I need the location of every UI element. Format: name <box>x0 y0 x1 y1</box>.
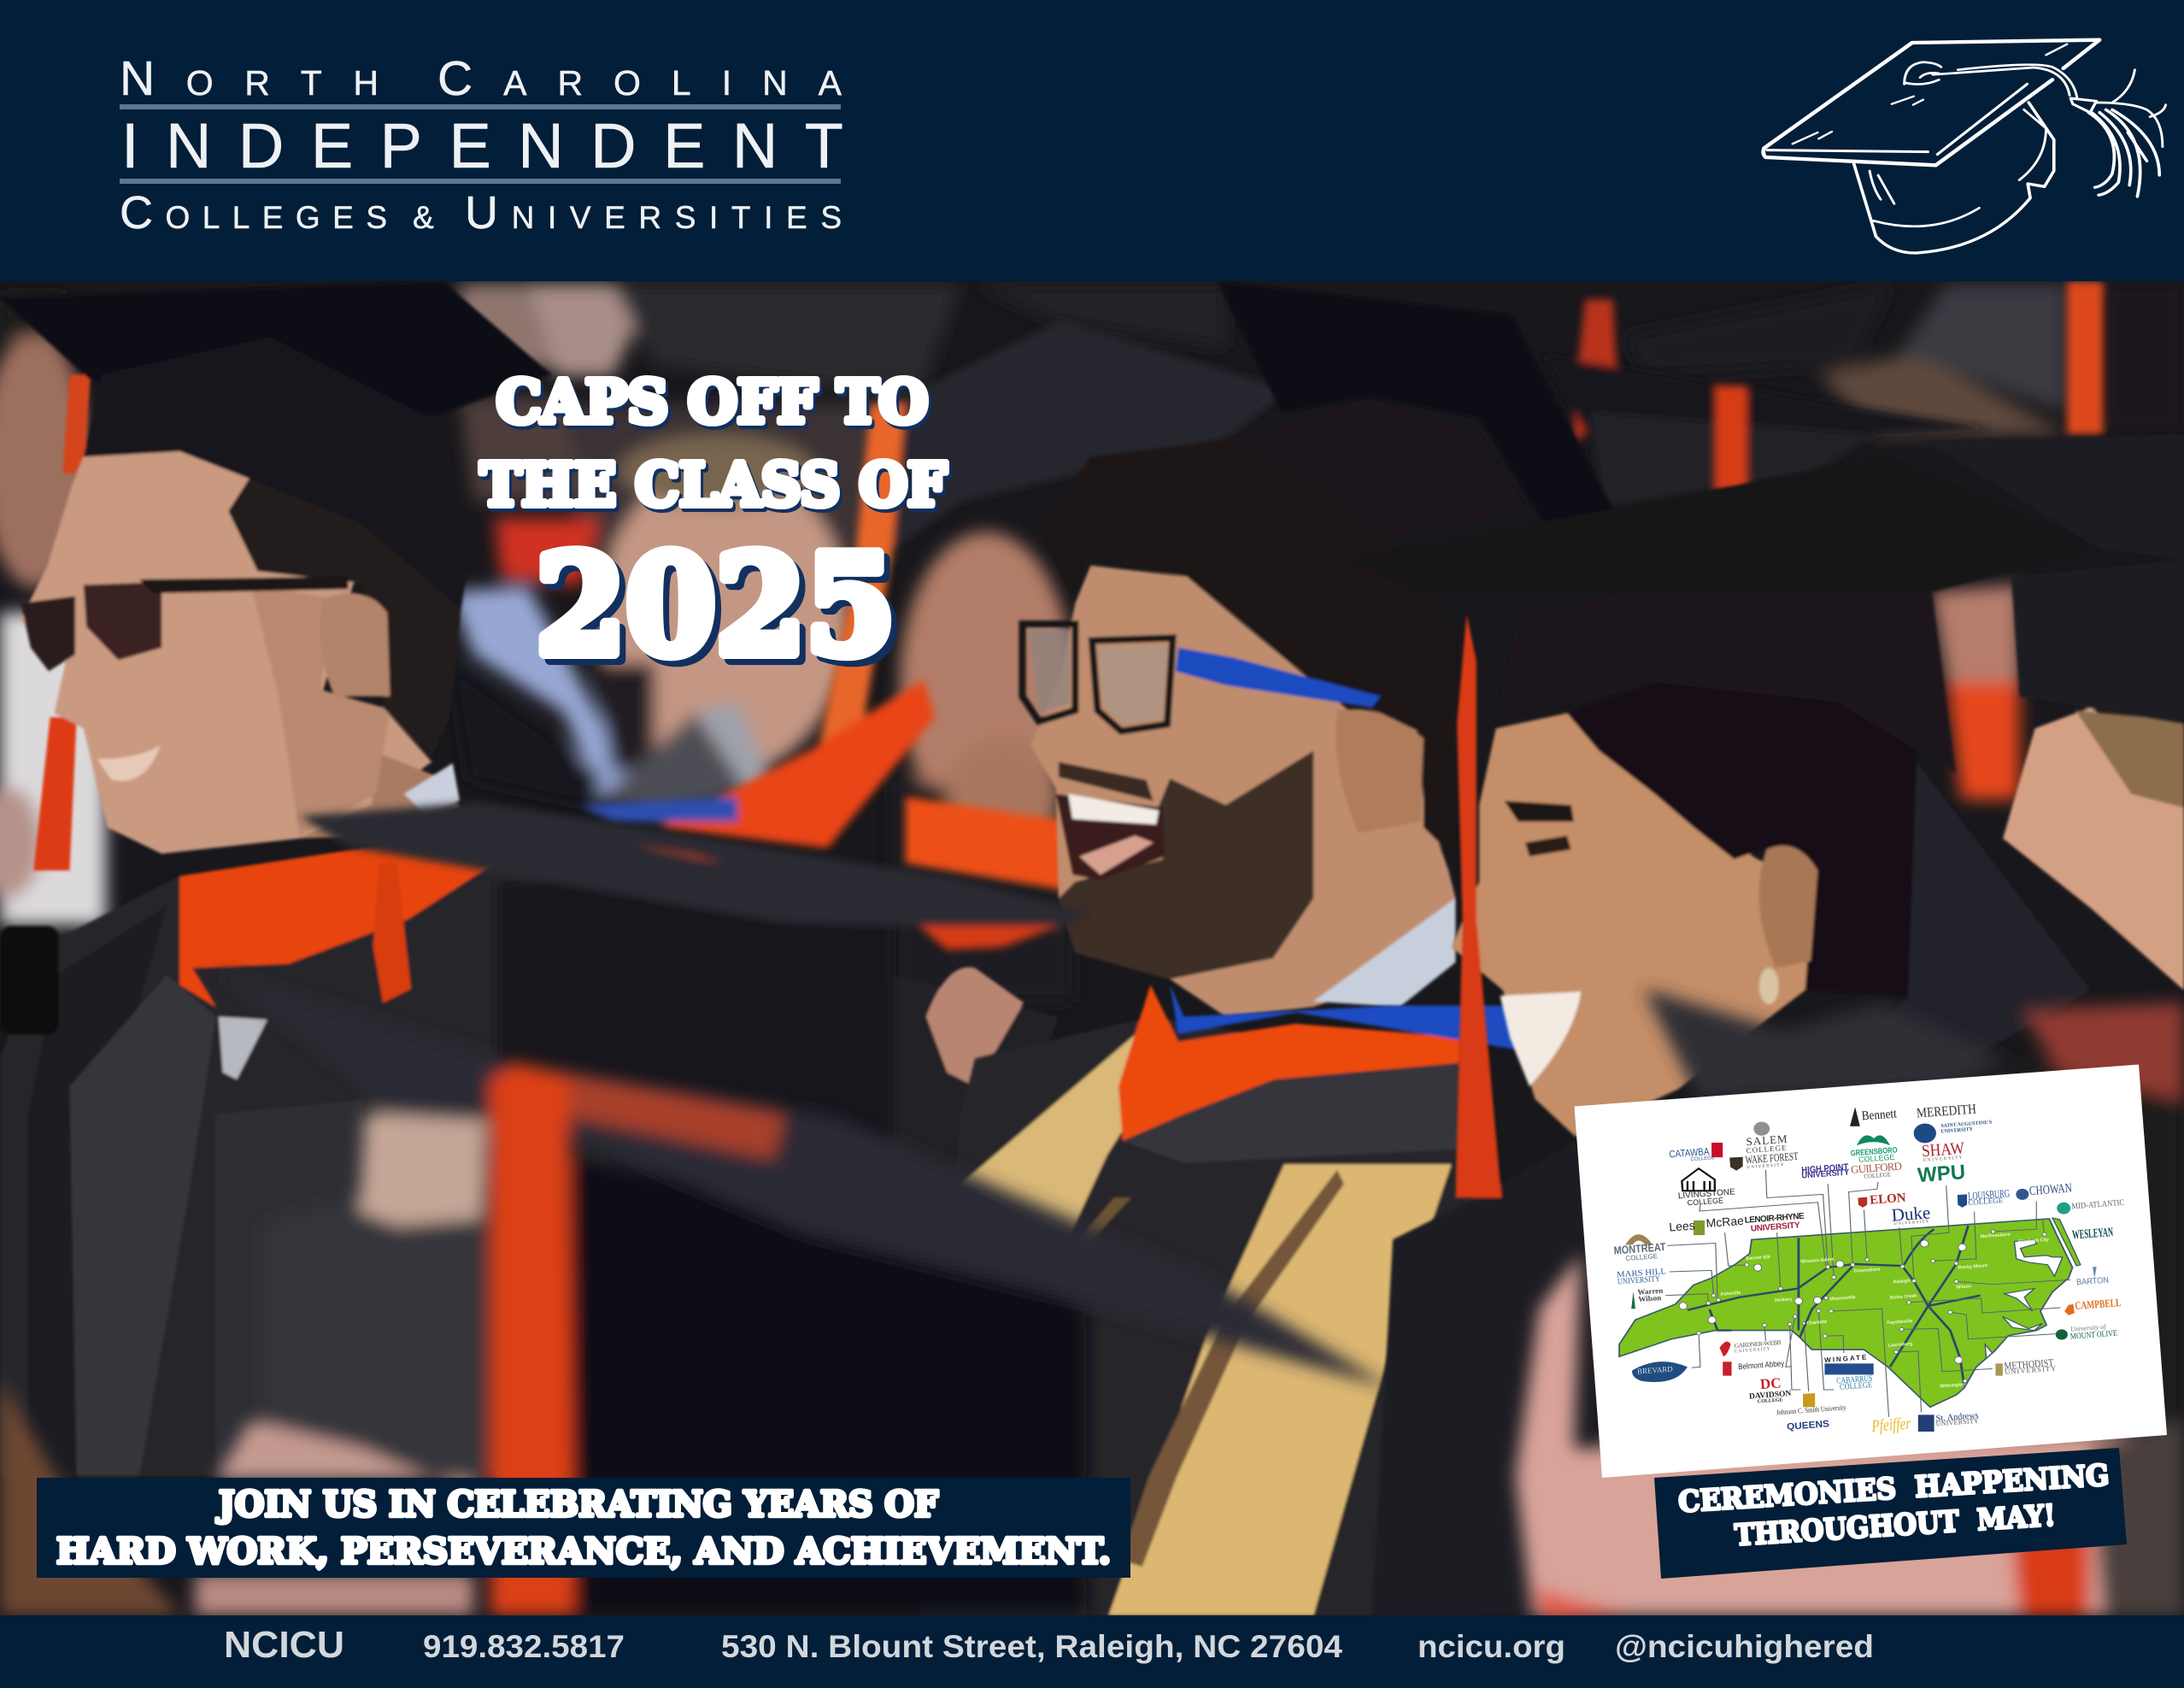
city names on the map: Murfreesboro <box>1980 1232 2011 1239</box>
school names: Lees <box>1669 1218 1695 1234</box>
school names: WINGATE <box>1824 1353 1869 1364</box>
school names: WAKE FOREST <box>1745 1150 1799 1166</box>
school names <box>1613 1102 2125 1436</box>
school names: UNIVERSITY <box>1801 1167 1850 1181</box>
school names: COLLEGE <box>1858 1153 1895 1164</box>
school names: COLLEGE <box>1968 1196 2004 1207</box>
school logo icons <box>1625 1107 2097 1432</box>
school names: CHOWAN <box>2028 1181 2073 1198</box>
left man gown <box>0 762 610 1477</box>
school names: GUILFORD <box>1851 1159 1902 1176</box>
school names: COLLEGE <box>1758 1397 1783 1404</box>
connector lines from schools to cities <box>1665 1170 2070 1417</box>
city names on the map: Wilmington <box>1940 1382 1966 1389</box>
interstate roads <box>1688 1226 1981 1386</box>
school names: DAVIDSON <box>1749 1390 1792 1402</box>
school names: METHODIST <box>2004 1356 2054 1372</box>
school names: BREVARD <box>1637 1364 1674 1376</box>
city names on the map <box>1720 1232 2050 1389</box>
foreground blurred mortarboard <box>0 971 1393 1615</box>
school names: WPU <box>1917 1161 1966 1187</box>
school names: CATAWBA <box>1669 1145 1710 1160</box>
school names: UNIVERSITY <box>1935 1417 1979 1427</box>
callout: ceremonies happening throughout May: THROUGHOUT MAY! <box>1734 1498 2057 1553</box>
school names: Wilson <box>1638 1293 1662 1303</box>
mid-ground blurred cap and tassels <box>581 281 2103 891</box>
school names: MEREDITH <box>1916 1102 1977 1121</box>
city names on the map: Greensboro <box>1853 1267 1881 1274</box>
school names: St. Andrews <box>1935 1411 1979 1424</box>
banner: join us in celebrating <box>37 1478 1130 1578</box>
banner: join us in celebrating: HARD WORK, PERSEVERANCE, AND ACHIEVEMENT. <box>56 1531 1111 1572</box>
title: Caps off to the class of 2025: CAPS OFF TO <box>496 368 928 437</box>
footer band <box>0 1615 2184 1688</box>
footer contact details: 530 N. Blount Street, Raleigh, NC 27604 <box>721 1629 1342 1664</box>
school names: COLLEGE <box>1840 1380 1872 1392</box>
city names on the map: Elizabeth City <box>2018 1238 2050 1245</box>
school names: UNIVERSITY <box>1750 1220 1800 1234</box>
footer contact details: NCICU <box>224 1624 344 1666</box>
NC state map shape <box>1619 1218 2081 1407</box>
center man gown and stole <box>919 985 1519 1615</box>
map card: NC independent colleges map <box>1574 1065 2167 1478</box>
foreground blurred woman <box>1516 989 2184 1622</box>
city names on the map: Rocky Mount <box>1958 1263 1987 1271</box>
school names: LIVINGSTONE <box>1678 1187 1735 1201</box>
school names: COLLEGE <box>1687 1196 1723 1207</box>
school names: HIGH POINT <box>1801 1162 1849 1176</box>
logo: North Carolina Independent Colleges & Universities: N ORTH <box>120 51 379 106</box>
school names: MOUNT OLIVE <box>2070 1329 2117 1342</box>
school names: UNIVERSITY <box>1923 1155 1964 1163</box>
city names on the map: Raleigh <box>1893 1279 1911 1285</box>
logo: North Carolina Independent Colleges & Universities: C OLLEGES <box>120 187 387 238</box>
icon: graduation cap <box>1764 40 2166 253</box>
school names: COLLEGE <box>1625 1252 1658 1262</box>
school names: BARTON <box>2076 1276 2109 1287</box>
city names on the map: Buies Creek <box>1890 1293 1918 1301</box>
school names: CABARRUS <box>1836 1374 1873 1386</box>
left man <box>0 281 552 870</box>
header band <box>0 0 2184 281</box>
school names: GREENSBORO <box>1850 1145 1898 1158</box>
school names: MONTREAT <box>1613 1240 1666 1257</box>
title: Caps off to the class of 2025: 2025 <box>536 525 895 685</box>
city names on the map: Mooresville <box>1829 1295 1856 1302</box>
city names on the map: Winston-Salem <box>1800 1257 1835 1265</box>
school names: GARDNER-WEBB <box>1734 1338 1782 1350</box>
city names on the map: Charlotte <box>1806 1320 1827 1326</box>
school names: McRae <box>1706 1214 1745 1230</box>
title: Caps off to the class of 2025: THE CLASS OF <box>483 455 949 523</box>
school names: QUEENS <box>1787 1419 1829 1432</box>
school names: Bennett <box>1861 1107 1898 1123</box>
school names: UNIVERSITY <box>1940 1127 1974 1135</box>
footer contact details: ncicu.org <box>1418 1629 1565 1664</box>
city names on the map: Wilson <box>1956 1284 1972 1291</box>
school names: SAINT AUGUSTINE'S <box>1940 1120 1993 1129</box>
footer contact details <box>224 1624 1874 1666</box>
school names: CAMPBELL <box>2075 1296 2122 1312</box>
school names: University of <box>2070 1323 2107 1333</box>
photo: graduates at commencement <box>0 281 2184 1615</box>
school names: SALEM <box>1746 1132 1788 1148</box>
logo: North Carolina Independent Colleges & Universities <box>120 51 843 238</box>
school names: UNIVERSITY <box>1617 1274 1660 1287</box>
banner: join us in celebrating: JOIN US IN CELEBRATING YEARS OF <box>216 1484 938 1525</box>
callout: ceremonies happening throughout May <box>1654 1448 2127 1579</box>
center man <box>894 282 1613 1162</box>
city markers <box>1679 1230 2046 1383</box>
city names on the map: Hickory <box>1775 1297 1793 1303</box>
title: Caps off to the class of 2025: THE CLASS OF <box>480 451 947 520</box>
logo: North Carolina Independent Colleges & Universities: INDEPENDENT <box>121 110 843 181</box>
right man and cap <box>1898 434 2184 1049</box>
school names: DC <box>1759 1374 1782 1392</box>
school names: UNIVERSITY <box>1735 1347 1771 1355</box>
footer contact details: @ncicuhighered <box>1615 1629 1874 1664</box>
title: Caps off to the class of 2025 <box>480 368 949 691</box>
logo: North Carolina Independent Colleges & Universities: & <box>413 200 434 235</box>
school names: Johnson C. Smith University <box>1776 1403 1847 1416</box>
school names: COLLEGE <box>1690 1156 1715 1162</box>
school names: MID-ATLANTIC <box>2071 1198 2125 1211</box>
school names: LOUISBURG <box>1968 1186 2011 1203</box>
city names on the map: Fayetteville <box>1887 1319 1913 1326</box>
logo: North Carolina Independent Colleges & Universities: C AROLINA <box>437 51 842 106</box>
school names: Pfeiffer <box>1870 1415 1911 1436</box>
city names on the map: Banner Elk <box>1746 1255 1771 1262</box>
logo: North Carolina Independent Colleges & Universities: U NIVERSITIES <box>465 187 842 238</box>
school names: UNIVERSITY <box>1747 1163 1785 1170</box>
callout: ceremonies happening throughout May: CEREMONIES HAPPENING <box>1677 1458 2111 1520</box>
foreground cap board and skull <box>299 803 1086 1142</box>
school names: UNIVERSITY <box>1893 1220 1930 1226</box>
school names: COLLEGE <box>1864 1171 1891 1180</box>
city names on the map: Laurinburg <box>1888 1342 1913 1349</box>
school names: SHAW <box>1921 1139 1965 1161</box>
background crowd <box>0 284 2184 1003</box>
school names: UNIVERSITY <box>2005 1364 2058 1376</box>
title: Caps off to the class of 2025: CAPS OFF TO <box>499 372 931 440</box>
woman graduate <box>1353 468 2015 1615</box>
city names on the map: Asheville <box>1720 1291 1741 1297</box>
school names: COLLEGE <box>1746 1144 1788 1155</box>
school names: MARS HILL <box>1617 1267 1666 1280</box>
school names: Warren <box>1637 1286 1664 1297</box>
school names: Duke <box>1891 1202 1931 1226</box>
school names: WESLEYAN <box>2072 1226 2114 1243</box>
title: Caps off to the class of 2025: 2025 <box>542 531 901 691</box>
school names: LENOIR-RHYNE <box>1744 1212 1805 1226</box>
footer contact details: 919.832.5817 <box>423 1629 625 1664</box>
school names: Belmont Abbey <box>1738 1359 1785 1372</box>
school names: ELON <box>1870 1191 1906 1208</box>
